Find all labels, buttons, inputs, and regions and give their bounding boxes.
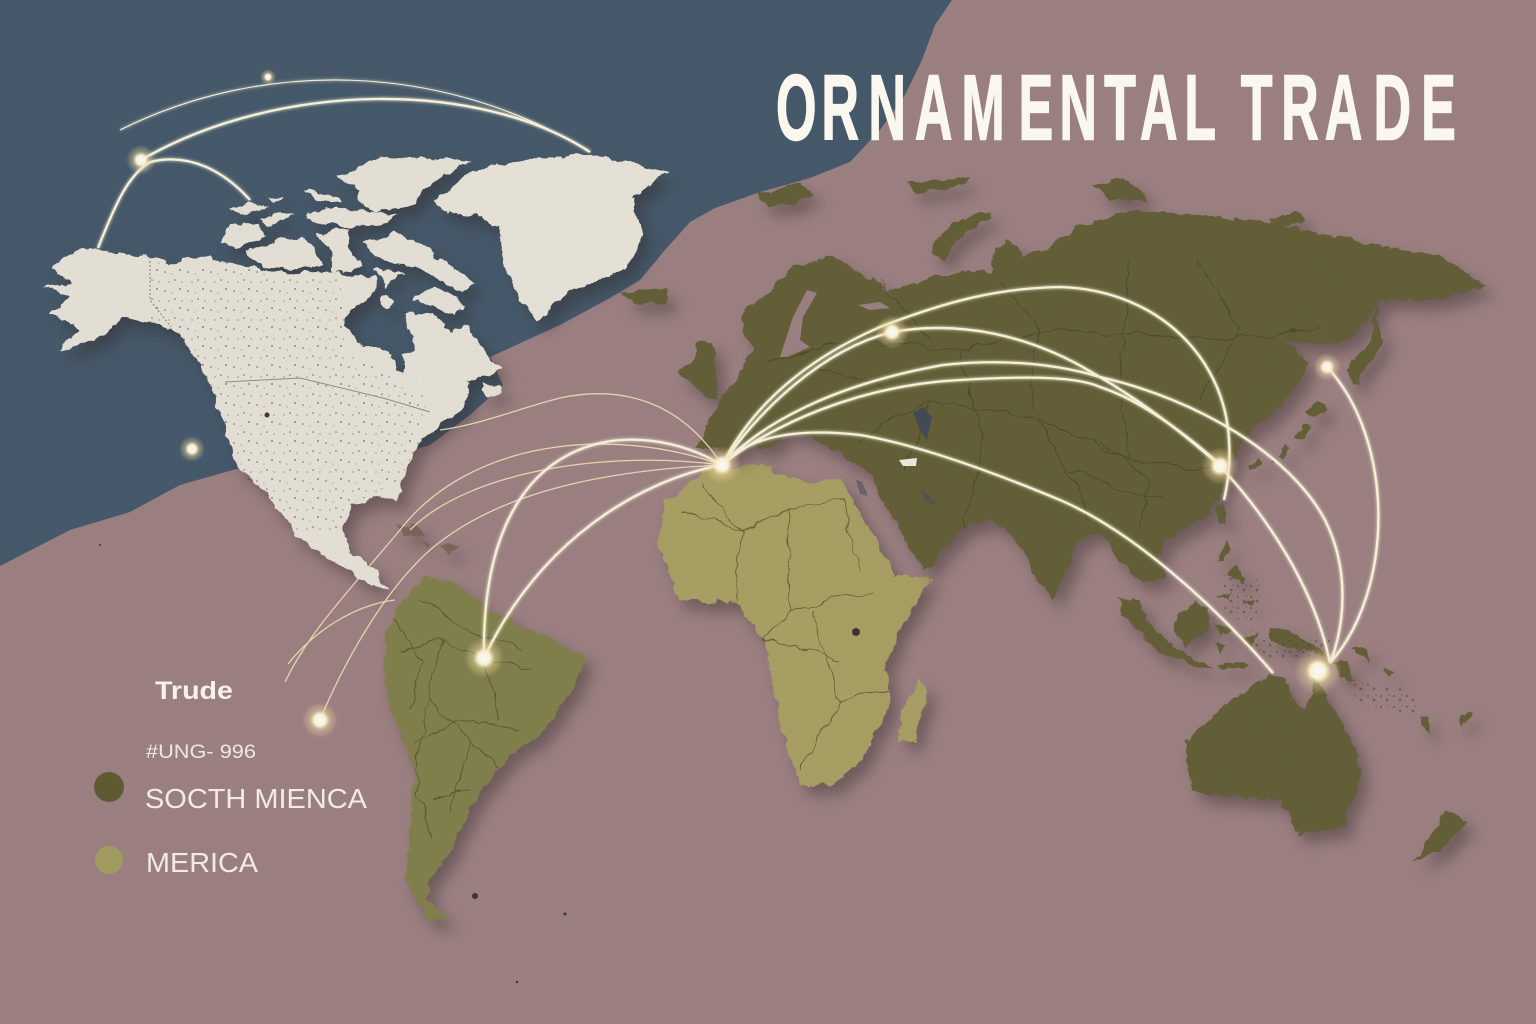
map: Africa [658, 465, 932, 786]
Baltic Sea [780, 290, 817, 357]
Philippines [1217, 540, 1232, 560]
South America rivers and borders [395, 600, 530, 840]
Red Sea and Persian Gulf [856, 480, 936, 505]
legend swatch: dark olive [94, 772, 124, 802]
Eurasia [697, 210, 1486, 602]
Indonesia [1118, 597, 1213, 668]
North America mainland [42, 248, 501, 592]
Svalbard and Arctic islands [755, 182, 812, 210]
legend swatch: light olive [95, 846, 123, 874]
legend label: America: MERICA [146, 847, 258, 878]
Australia [1185, 673, 1362, 835]
legend heading: Trude [155, 677, 233, 705]
map: Eurasia internal borders [770, 260, 1320, 530]
Persian Gulf speck [899, 458, 917, 466]
glowing node markers [126, 69, 1342, 738]
ocean panel [0, 0, 952, 566]
map: Eurasia and Oceania [620, 176, 1486, 860]
legend [94, 677, 367, 878]
title: ORNAMENTAL TRADE [776, 56, 1456, 159]
Greenland [434, 153, 669, 320]
Canadian Arctic islands [221, 157, 503, 398]
arcs: pale trade routes to the Americas [285, 394, 722, 720]
Taiwan [1217, 503, 1227, 525]
Caspian Sea [913, 407, 932, 440]
Africa borders [680, 480, 890, 770]
Japan [1347, 300, 1382, 385]
Britain [677, 340, 720, 400]
arcs: bright trade routes [98, 80, 1378, 673]
Caribbean islands [395, 524, 462, 554]
small dark specks [99, 412, 860, 983]
scattered island specks [1222, 575, 1420, 715]
North America borders [225, 378, 430, 412]
legend label: South America: SOCTH MIENCA [145, 783, 367, 814]
New Zealand [1414, 810, 1468, 860]
map: South America [385, 575, 585, 920]
White Sea lake [858, 302, 890, 310]
North America speckle [150, 262, 430, 530]
Novaya Zemlya [930, 212, 992, 260]
legend subheading: #UNG- 996 [146, 742, 256, 763]
map: North America group [42, 153, 669, 592]
Madagascar [898, 680, 928, 742]
Iceland [620, 288, 666, 306]
